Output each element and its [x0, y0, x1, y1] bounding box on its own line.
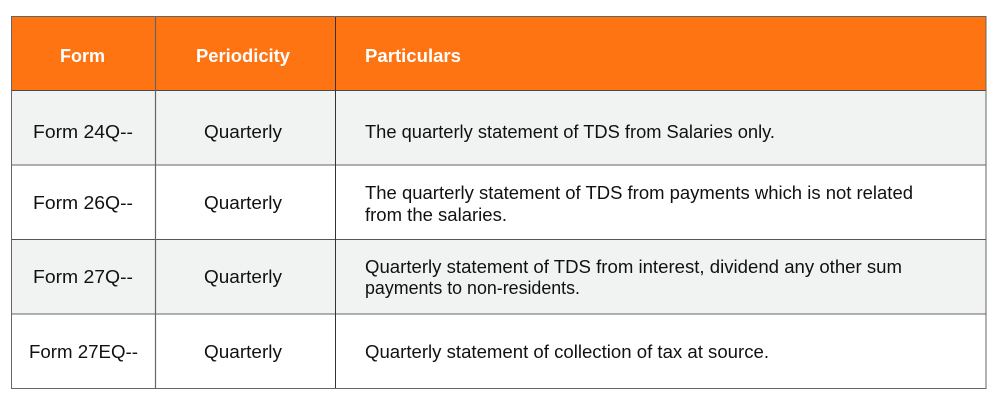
row: Form 27EQ: Quarterly [204, 342, 282, 362]
header: Particulars: Particulars [365, 46, 461, 66]
header row [11, 16, 986, 91]
row: Form 26Q: The quarterly statement of TDS from payments which is not related [365, 183, 913, 203]
header: Form: Form [60, 46, 105, 66]
row: Form 26Q: Quarterly [204, 193, 282, 213]
row: Form 27EQ: Form 27EQ-- [29, 342, 138, 362]
row: Form 27EQ [11, 314, 986, 389]
row: Form 24Q: Quarterly [204, 122, 282, 142]
row: Form 26Q: from the salaries. [365, 205, 507, 225]
row: Form 27EQ: Quarterly statement of collection of tax at source. [365, 342, 769, 362]
row: Form 24Q [11, 91, 986, 165]
row: Form 27Q: Quarterly [204, 267, 282, 287]
row: Form 27Q: Form 27Q-- [33, 267, 133, 287]
row: Form 24Q: The quarterly statement of TDS from Salaries only. [365, 122, 775, 142]
row: Form 27Q: Quarterly statement of TDS from interest, dividend any other sum [365, 257, 902, 277]
header: Periodicity: Periodicity [196, 46, 290, 66]
row: Form 26Q: Form 26Q-- [33, 193, 133, 213]
row: Form 26Q [11, 165, 986, 240]
row: Form 24Q: Form 24Q-- [33, 122, 133, 142]
row: Form 27Q: payments to non-residents. [365, 278, 580, 298]
row: Form 27Q [11, 240, 986, 314]
